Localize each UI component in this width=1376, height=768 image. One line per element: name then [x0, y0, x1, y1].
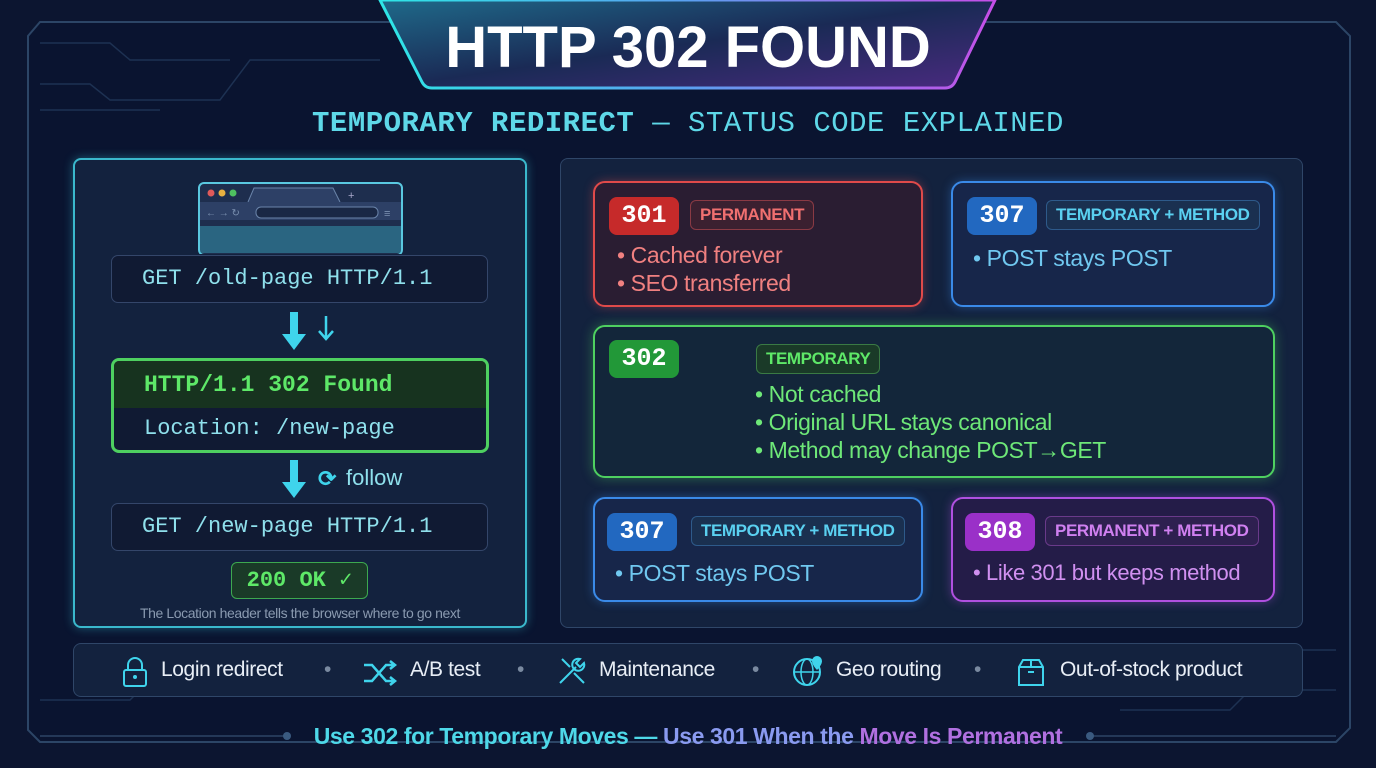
icon: globe: [793, 656, 822, 686]
caption: The Location header tells the browser where to go next: [140, 605, 460, 621]
use cases bar: Login redirect: [161, 658, 283, 681]
use cases bar: A/B test: [410, 658, 480, 681]
arrow: follow: follow: [346, 465, 402, 490]
card: 302: [593, 325, 1275, 478]
card: 308: [951, 497, 1275, 602]
footer tagline: Use 302 for Temporary Moves — Use 301 When the Move Is Permanent: [314, 723, 1062, 749]
icon: box: [1018, 659, 1044, 686]
panel: request flow: [73, 158, 527, 628]
badge: 200 OK: 200 OK ✓: [247, 568, 352, 593]
use cases bar: •: [324, 658, 331, 681]
card: 302: • Original URL stays canonical: [755, 409, 1052, 435]
response box 302: Location: /new-page: [144, 416, 395, 441]
panel: status codes: [560, 158, 1303, 628]
use cases bar: Out-of-stock product: [1060, 658, 1242, 681]
icon: browser: ← → ↻: [206, 208, 240, 219]
subtitle: TEMPORARY REDIRECT — STATUS CODE EXPLAINED: [312, 107, 1064, 140]
use cases bar: •: [517, 658, 524, 681]
icon: lock: [123, 657, 147, 687]
response box 302: HTTP/1.1 302 Found: [144, 372, 392, 398]
title banner: [378, 0, 997, 90]
badge: 200 OK: [231, 562, 368, 599]
card: 308: PERMANENT + METHOD: [1055, 521, 1249, 540]
card: 301: • Cached forever: [617, 242, 782, 268]
card: 301: 301: [621, 201, 666, 230]
use cases bar: [73, 643, 1303, 697]
icon: browser: +: [348, 190, 354, 202]
card: 308: 308: [977, 517, 1022, 546]
card: 307 top: • POST stays POST: [973, 245, 1172, 271]
footer tagline: [40, 723, 1336, 749]
text block: request: [111, 255, 488, 303]
icon: tools: [559, 658, 586, 684]
card: 307 bottom: 307: [619, 517, 664, 546]
use cases bar: •: [752, 658, 759, 681]
title banner: HTTP 302 FOUND: [445, 15, 931, 80]
card: 302: 302: [621, 344, 666, 373]
card: 308: • Like 301 but keeps method: [973, 560, 1240, 585]
text block: new request: GET /new-page HTTP/1.1: [142, 514, 432, 539]
response box 302: [111, 358, 489, 453]
icon: browser: [198, 182, 403, 254]
card: 301: PERMANENT: [700, 205, 804, 224]
card: 307 bottom: TEMPORARY + METHOD: [701, 521, 895, 540]
card: 307 top: TEMPORARY + METHOD: [1056, 205, 1250, 224]
use cases bar: •: [974, 658, 981, 681]
text block: new request: [111, 503, 488, 551]
card: 301: [593, 181, 923, 307]
text block: request: GET /old-page HTTP/1.1: [142, 266, 432, 291]
card: 307 bottom: [593, 497, 923, 602]
card: 307 top: 307: [979, 201, 1024, 230]
card: 302: TEMPORARY: [766, 349, 870, 368]
use cases bar: Geo routing: [836, 658, 941, 681]
card: 307 bottom: • POST stays POST: [615, 560, 814, 586]
arrow: follow: ⟳: [318, 466, 337, 491]
arrow: follow: [282, 460, 402, 498]
card: 307 top: [951, 181, 1275, 307]
arrow: down: [282, 312, 334, 350]
card: 302: • Not cached: [755, 381, 881, 407]
card: 301: • SEO transferred: [617, 270, 791, 296]
icon: browser: ≡: [384, 208, 390, 220]
use cases bar: Maintenance: [599, 658, 715, 681]
card: 302: • Method may change POST→GET: [755, 437, 1106, 463]
icon: shuffle: [364, 660, 397, 686]
